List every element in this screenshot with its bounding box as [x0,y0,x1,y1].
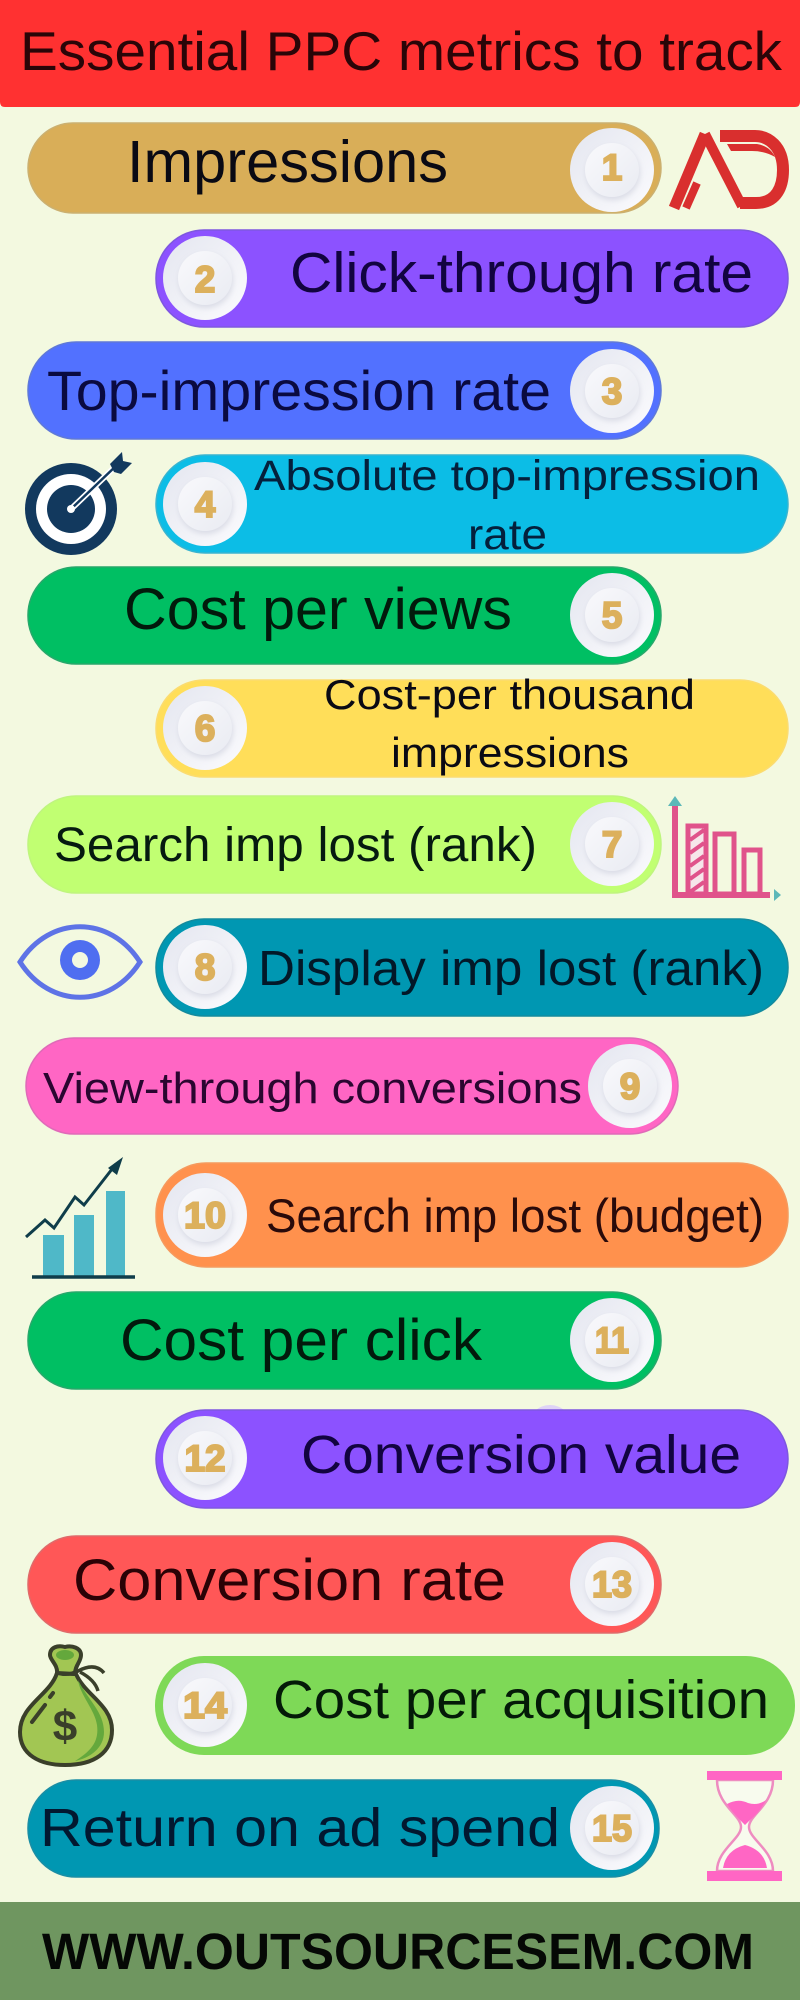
pill [156,230,788,327]
metric 3: top-impression rate [28,342,661,439]
label: Search imp lost (budget) [266,1189,764,1242]
metric 4: absolute top-impression rate [156,452,788,559]
icon: eye [20,927,140,997]
number badge 6: 6 [195,708,215,749]
metric 1: impressions [28,123,661,213]
metric 11: cost per click [28,1292,661,1389]
website url: WWW.OUTSOURCESEM.COM [42,1923,754,1980]
number badge 10: 10 [184,1195,226,1236]
pill [156,1163,788,1267]
label line 2: rate [468,511,547,559]
number badge 3 [570,349,654,433]
metric 13: conversion rate [28,1536,661,1633]
label line 1: Absolute top-impression [254,452,760,500]
number badge 12 [163,1416,247,1500]
label: Cost per views [124,577,512,642]
number badge 9 [588,1044,672,1128]
number badge 3: 3 [602,371,622,412]
metric 2: click-through rate [156,230,788,327]
number badge 15: 15 [592,1808,632,1849]
label: Conversion value [301,1425,741,1485]
number badge 13 [570,1542,654,1626]
label: Impressions [127,129,448,195]
label: Cost per acquisition [273,1670,769,1730]
number badge 6 [163,686,247,770]
label: Search imp lost (rank) [54,819,537,872]
number badge 7: 7 [602,824,622,865]
metric 7: search imp lost (rank) [28,796,661,893]
title banner [0,0,800,107]
icon: target with arrow [25,452,132,555]
pill [28,1292,661,1389]
pill [155,1656,795,1755]
banner background [0,0,800,107]
metric 14: cost per acquisition [155,1656,795,1755]
number badge 13: 13 [592,1564,632,1605]
icon: money bag [20,1646,112,1765]
pill [156,1410,788,1508]
number badge 4: 4 [195,484,216,525]
icon: money bag: $ [53,1702,77,1751]
pill [28,567,661,664]
number badge 11 [570,1298,654,1382]
icon: bar chart [668,796,781,901]
number badge 11: 11 [595,1320,629,1361]
title: Essential PPC metrics to track [20,20,783,82]
pill [28,796,661,893]
metric 10: search imp lost (budget) [156,1163,788,1267]
label: Click-through rate [290,241,753,305]
metric 6: cost-per thousand impressions [156,671,788,777]
label: Conversion rate [73,1548,506,1613]
icon: AD logo [674,134,783,208]
number badge 2: 2 [195,259,215,300]
label: Display imp lost (rank) [258,942,764,996]
number badge 10 [163,1173,247,1257]
icon: growth chart [26,1157,135,1277]
number badge 8 [163,925,247,1009]
number badge 9: 9 [620,1066,640,1107]
label: Top-impression rate [47,359,551,422]
pill [28,1536,661,1633]
icon: hourglass [707,1771,782,1881]
number badge 5 [570,573,654,657]
number badge 14: 14 [183,1685,227,1726]
number badge 12: 12 [184,1438,226,1479]
pill [156,680,788,777]
pill [28,123,661,213]
pill [156,455,788,553]
ghost arc [528,1405,572,1449]
metric 8: display imp lost (rank) [156,919,788,1016]
footer background [0,1902,800,2000]
number badge 4 [163,462,247,546]
number badge 8: 8 [195,947,215,988]
label: View-through conversions [43,1064,582,1113]
number badge 5: 5 [602,595,622,636]
number badge 7 [570,802,654,886]
label line 1: Cost-per thousand [324,671,695,718]
metric 9: view-through conversions [26,1038,678,1134]
pill [26,1038,678,1134]
metric 5: cost per views [28,567,661,664]
footer band [0,1902,800,2000]
label: Return on ad spend [40,1798,560,1858]
pill [156,919,788,1016]
number badge 15 [570,1786,654,1870]
label: Cost per click [120,1308,483,1373]
pill [28,342,661,439]
number badge 14 [163,1663,247,1747]
metric 15: return on ad spend [28,1780,659,1877]
metric 12: conversion value [156,1405,788,1508]
label line 2: impressions [391,729,629,776]
number badge 1 [570,128,654,212]
number badge 2 [163,236,247,320]
number badge 1: 1 [602,147,622,188]
pill [28,1780,659,1877]
